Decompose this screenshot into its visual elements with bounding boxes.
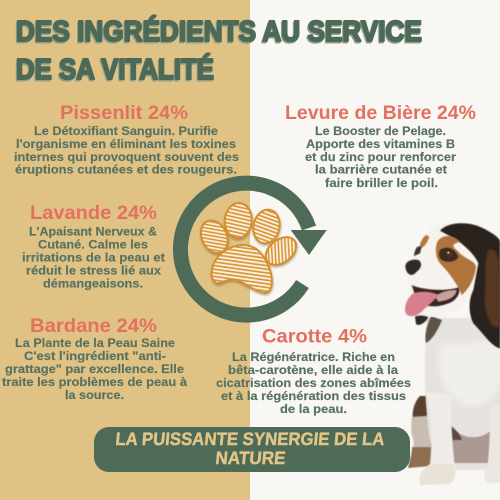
panel: Levure de Bière: la barrière cutanée et xyxy=(315,162,447,176)
dog: dark eye patch xyxy=(439,248,458,262)
dog: eye glint xyxy=(447,252,449,254)
title: DES INGRÉDIENTS AU SERVICE xyxy=(16,14,422,48)
dog: chest highlight xyxy=(439,340,500,406)
dog: left dark spot xyxy=(414,247,422,256)
dog: mouth xyxy=(412,285,459,306)
banner: LA PUISSANTE SYNERGIE DE LA xyxy=(115,429,385,449)
dog: black top of head and ear xyxy=(440,223,500,348)
panel: Lavande: Lavande 24% xyxy=(30,203,157,224)
dog: eye xyxy=(446,251,453,257)
panel: Levure de Bière: et du zinc pour renforcer xyxy=(305,150,456,164)
dog: front left leg xyxy=(426,392,455,468)
panel: Lavande: démangeaisons. xyxy=(43,276,143,290)
dog: front right leg and paw xyxy=(484,405,500,483)
illustration: dog xyxy=(408,316,500,485)
background: left tan panel xyxy=(0,0,250,500)
dog: gums xyxy=(435,290,457,302)
dog: tongue xyxy=(405,292,438,316)
dog: tan patch around eye xyxy=(436,236,476,295)
panel: Carotte: de la peau. xyxy=(280,402,347,416)
panel: Bardane: La Plante de la Peau Saine xyxy=(15,336,175,350)
panel: Carotte: Carotte 4% xyxy=(262,326,367,348)
illustration: dog head xyxy=(405,222,500,348)
icon: circular arrow xyxy=(180,183,327,315)
dog: neck patch xyxy=(425,316,442,343)
panel: Lavande: réduit le stress lié aux xyxy=(26,264,161,278)
panel: Pissenlit: l'organisme en éliminant les toxines xyxy=(16,137,236,151)
dog: belly dark edge xyxy=(451,426,462,440)
dog: nose xyxy=(405,260,421,275)
dog: belly xyxy=(451,428,492,463)
panel: Levure de Bière: Apporte des vitamines B xyxy=(306,137,455,151)
panel: Lavande: L'Apaisant Nerveux & xyxy=(29,224,158,238)
dog: haunch xyxy=(408,396,436,468)
panel: Carotte xyxy=(216,326,411,416)
panel: Pissenlit: internes qui provoquent souvent des xyxy=(14,150,239,164)
panel: Lavande xyxy=(22,203,165,290)
panel: Bardane xyxy=(2,316,187,402)
panel: Bardane: traite les problèmes de peau à xyxy=(2,375,187,389)
panel: Carotte: bêta-carotène, elle aide à la xyxy=(228,363,398,377)
panel: Carotte: et à la régénération des tissus xyxy=(221,389,406,403)
panel: Lavande: Cutané. Calme les xyxy=(38,238,148,252)
dog: head white xyxy=(406,222,477,317)
panel: Bardane: C'est l'ingrédient "anti- xyxy=(24,349,166,363)
panel: Carotte: La Régénératrice. Riche en xyxy=(232,350,395,364)
panel: Lavande: irritations de la peau et xyxy=(22,250,165,264)
panel: Levure de Bière xyxy=(285,103,476,190)
panel: Bardane: la source. xyxy=(65,388,124,402)
title xyxy=(16,14,422,86)
banner xyxy=(94,427,410,472)
panel: Pissenlit: Pissenlit 24% xyxy=(60,103,188,124)
panel: Bardane: Bardane 24% xyxy=(30,316,157,337)
panel: Bardane: grattage" par excellence. Elle xyxy=(5,362,184,376)
banner: NATURE xyxy=(215,448,286,468)
dog: chin xyxy=(415,315,428,325)
panel: Carotte: cicatrisation des zones abîmées xyxy=(216,376,411,390)
panel: Levure de Bière: Le Booster de Pelage. xyxy=(315,124,446,138)
panel: Pissenlit xyxy=(14,103,239,176)
dog: ear brown xyxy=(485,249,500,327)
panel: Levure de Bière: Levure de Bière 24% xyxy=(285,103,476,124)
dog: front left paw xyxy=(419,464,455,485)
panel: Pissenlit: éruptions cutanées et des rougeurs. xyxy=(15,162,237,176)
title: DE SA VITALITÉ xyxy=(16,52,214,86)
panel: Pissenlit: Le Détoxifiant Sanguin. Purifie xyxy=(34,124,218,138)
panel: Levure de Bière: faire briller le poil. xyxy=(325,176,438,190)
dog: body and chest xyxy=(425,318,500,470)
icon: paw xyxy=(196,202,301,293)
dog: left tan spot xyxy=(419,235,429,248)
